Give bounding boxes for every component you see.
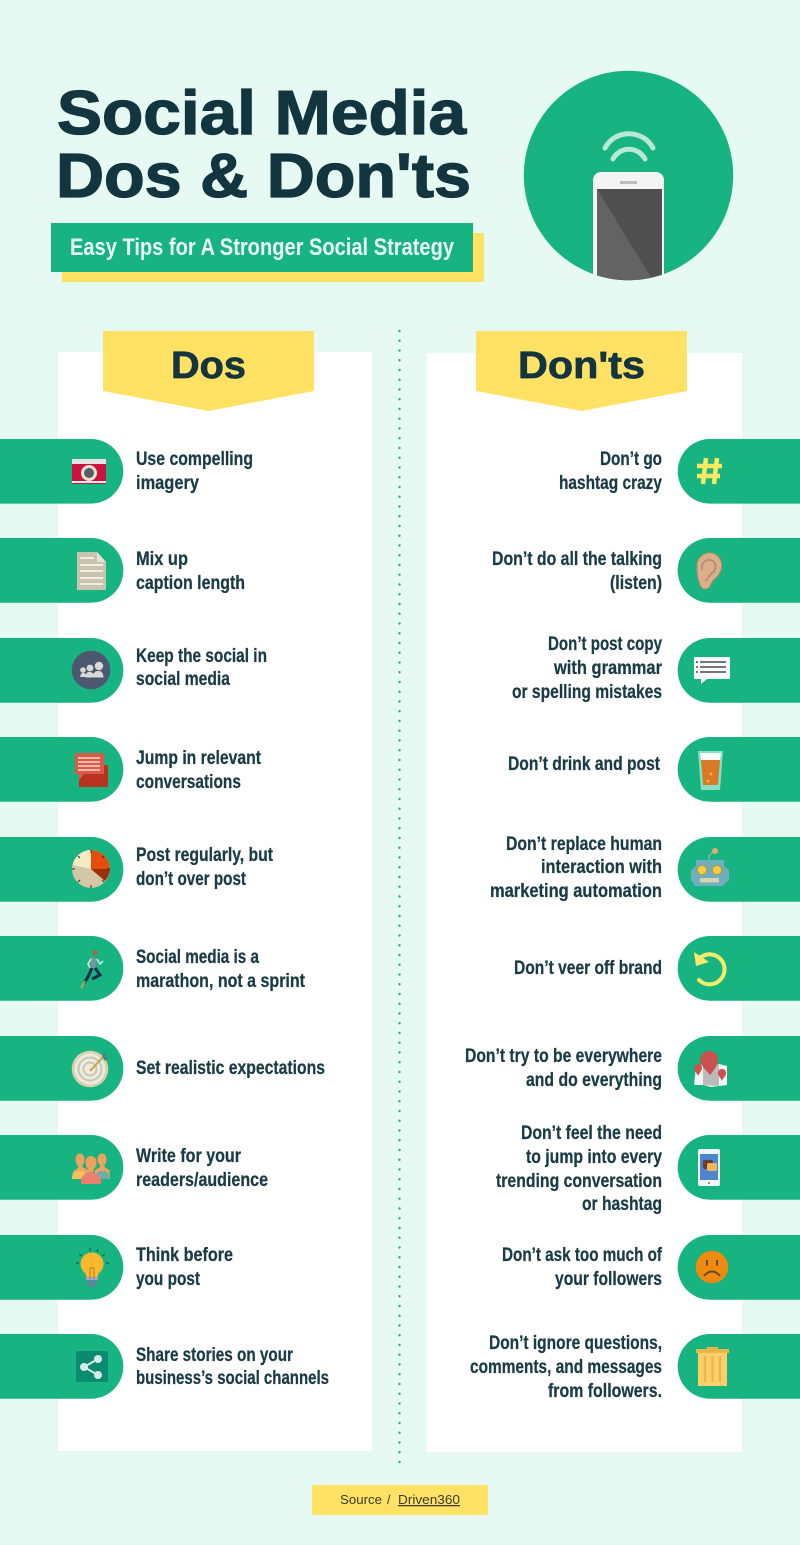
item: human interaction: interaction with	[541, 857, 662, 878]
item: grammar	[512, 634, 800, 703]
item: do all the talking: Don’t do all the talking	[492, 549, 662, 570]
icon: clock	[72, 850, 110, 888]
item: think before you post	[0, 1235, 233, 1300]
icon: sad face	[696, 1251, 728, 1283]
item: mix up caption length: Mix up	[136, 549, 188, 570]
item: drink and post	[508, 737, 800, 802]
heading: Don'ts	[476, 331, 687, 411]
item: hashtag crazy	[559, 439, 800, 504]
item: ask too much: Don’t ask too much of	[502, 1245, 663, 1266]
item: realistic expectations: Set realistic expectations	[136, 1058, 325, 1079]
item: use compelling imagery: imagery	[136, 473, 199, 494]
item: grammar: Don’t post copy	[548, 634, 662, 655]
item: post regularly	[0, 837, 274, 902]
item: ask too much	[502, 1235, 800, 1300]
panel: don'ts list	[465, 439, 800, 1402]
panel: dos list	[0, 439, 329, 1399]
item: keep the social in social media	[0, 638, 267, 703]
item: trending conversation: or hashtag	[582, 1194, 662, 1215]
item: realistic expectations	[0, 1036, 325, 1101]
icon: ear	[697, 553, 722, 589]
item: ignore questions: from followers.	[548, 1381, 662, 1402]
item: human interaction	[490, 834, 800, 902]
item: mix up caption length: caption length	[136, 573, 245, 594]
item: hashtag crazy: hashtag crazy	[559, 473, 662, 494]
icon: glass of beer	[698, 751, 723, 790]
item: keep the social in social media: social media	[136, 669, 230, 690]
item: grammar: with grammar	[553, 658, 663, 679]
item: ignore questions: Don’t ignore questions,	[489, 1333, 662, 1354]
item: marathon: marathon, not a sprint	[136, 971, 306, 992]
source footer: Driven360	[398, 1493, 460, 1507]
item: share stories	[0, 1334, 329, 1399]
item: write for your readers	[0, 1135, 268, 1200]
item: be everywhere	[465, 1036, 800, 1101]
item: trending conversation: to jump into every	[526, 1147, 662, 1168]
item: marathon: Social media is a	[136, 947, 259, 968]
heading: Dos: Dos	[171, 345, 246, 387]
item: marathon	[0, 936, 306, 1001]
item: veer off brand: Don’t veer off brand	[514, 958, 662, 979]
item: use compelling imagery: Use compelling	[136, 449, 253, 470]
icon: phone with signal in green circle	[524, 71, 733, 292]
item: trending conversation: trending conversation	[496, 1171, 662, 1192]
item: hashtag crazy: Don’t go	[600, 449, 662, 470]
item: grammar: or spelling mistakes	[512, 682, 662, 703]
item: post regularly: Post regularly, but	[136, 845, 274, 866]
title	[56, 79, 471, 211]
dotted center divider	[398, 331, 401, 1470]
icon: smartphone with chat	[698, 1149, 720, 1186]
title: Dos & Don'ts	[56, 142, 471, 211]
item: ignore questions	[470, 1333, 800, 1402]
subtitle banner	[51, 223, 484, 282]
title: Social Media	[57, 79, 467, 148]
item: keep the social in social media: Keep the social in	[136, 646, 267, 667]
item: trending conversation	[496, 1123, 800, 1215]
panel: dos background	[58, 352, 372, 1451]
source footer: Source	[340, 1493, 382, 1507]
item: drink and post: Don’t drink and post	[508, 754, 661, 775]
icon: map with pins	[694, 1051, 727, 1087]
item: do all the talking	[492, 538, 800, 603]
item: ask too much: your followers	[555, 1269, 662, 1290]
item: jump in relevant conversations: Jump in relevant	[136, 748, 262, 769]
item: jump in relevant conversations: conversations	[136, 772, 241, 793]
source footer	[312, 1485, 488, 1515]
icon: camera	[72, 459, 106, 484]
icon: message bubble	[694, 657, 730, 684]
heading: Dos	[103, 331, 314, 411]
subtitle banner: Easy Tips for A Stronger Social Strategy	[70, 234, 454, 261]
item: be everywhere: Don’t try to be everywhere	[465, 1046, 662, 1067]
item: write for your readers: Write for your	[136, 1146, 242, 1167]
item: human interaction: marketing automation	[490, 881, 662, 902]
item: human interaction: Don’t replace human	[506, 834, 662, 855]
item: ignore questions: comments, and messages	[470, 1357, 662, 1378]
item: veer off brand	[514, 936, 800, 1001]
item: trending conversation: Don’t feel the need	[521, 1123, 662, 1144]
icon: share	[76, 1351, 108, 1382]
item: share stories: business’s social channels	[136, 1368, 329, 1389]
panel: don'ts background	[427, 353, 742, 1452]
icon: robot	[691, 848, 729, 886]
icon: audience	[72, 1154, 110, 1184]
item: think before you post: you post	[136, 1269, 201, 1290]
item: share stories: Share stories on your	[136, 1345, 293, 1366]
item: think before you post: Think before	[136, 1245, 233, 1266]
item: post regularly: don’t over post	[136, 869, 247, 890]
icon: trash can	[696, 1347, 729, 1386]
item: use compelling imagery	[0, 439, 253, 504]
icon: runner	[81, 950, 103, 988]
icon: document	[77, 552, 106, 590]
item: do all the talking: (listen)	[610, 573, 662, 594]
item: jump in relevant conversations	[0, 737, 262, 802]
item: write for your readers: readers/audience	[136, 1170, 268, 1191]
icon: light bulb	[76, 1248, 109, 1286]
item: mix up caption length	[0, 538, 245, 603]
heading: Don'ts: Don'ts	[518, 345, 645, 387]
icon: hashtag	[697, 458, 722, 484]
source footer: /	[387, 1493, 391, 1507]
icon: target	[72, 1051, 110, 1087]
icon: chat bubbles	[75, 753, 108, 787]
icon: community circle	[72, 651, 110, 689]
item: be everywhere: and do everything	[526, 1070, 662, 1091]
icon: undo arrow	[694, 952, 725, 984]
